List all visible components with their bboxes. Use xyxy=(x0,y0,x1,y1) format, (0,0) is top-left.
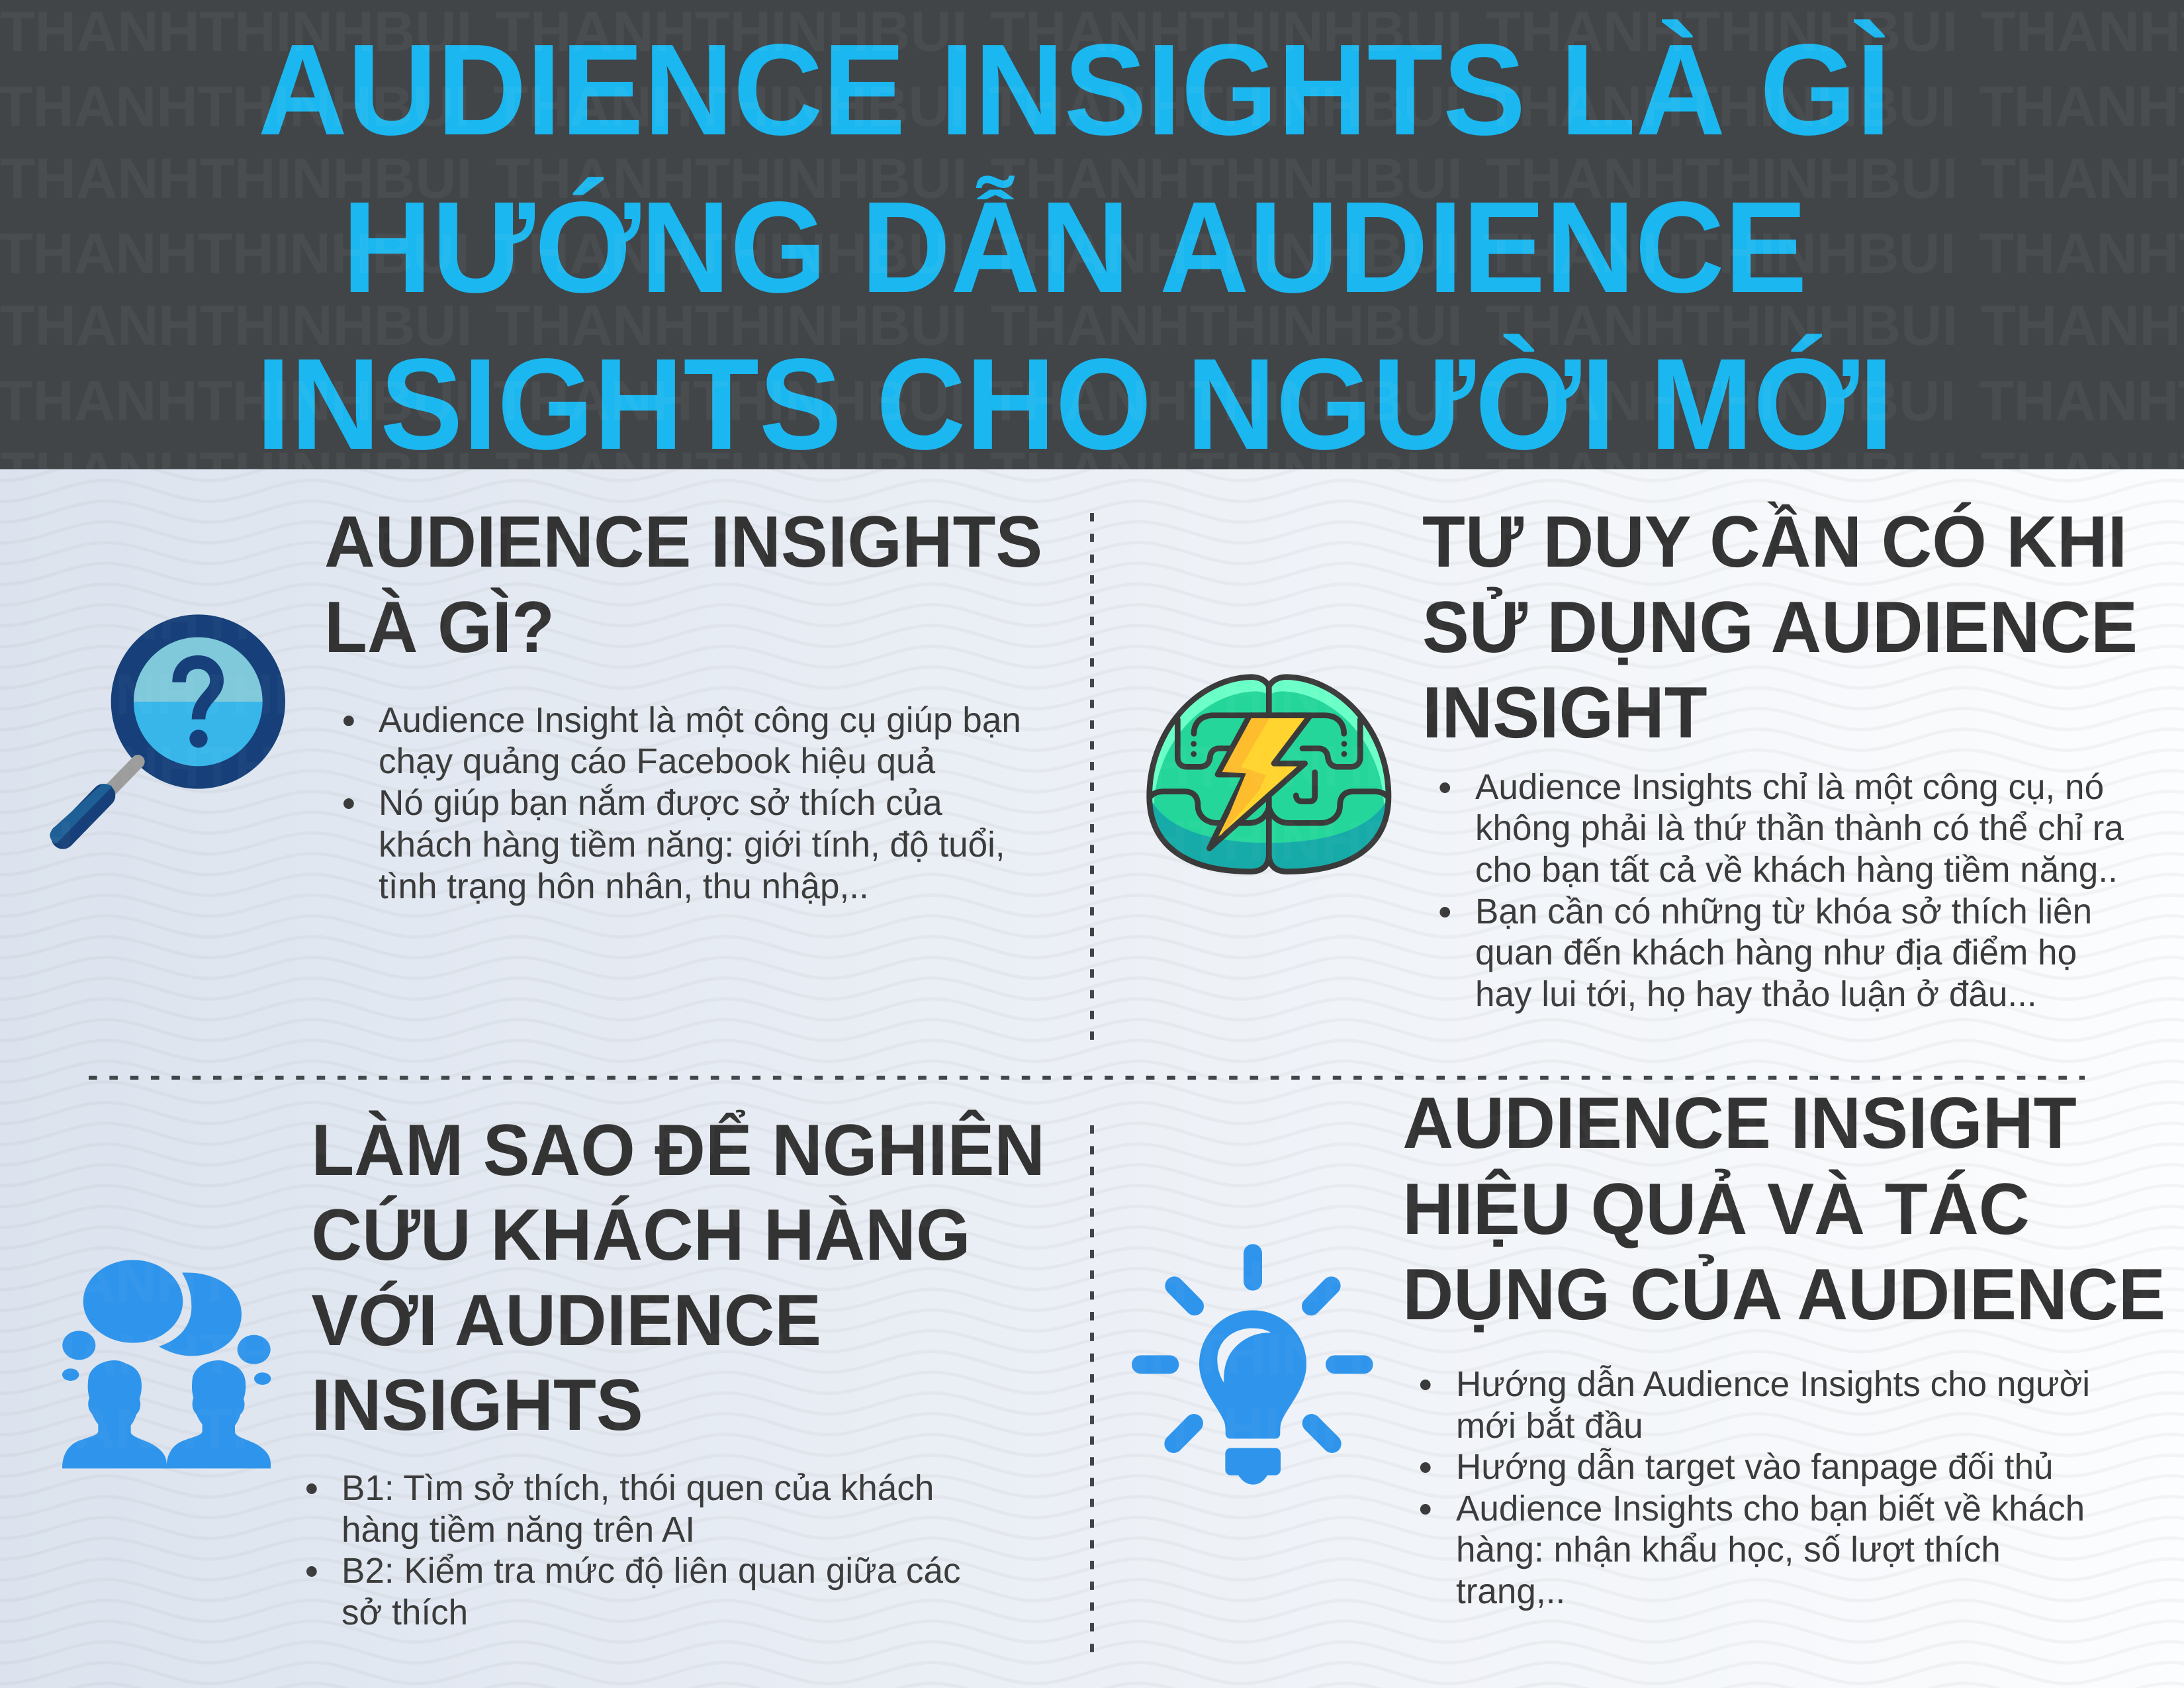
heading xyxy=(324,501,1042,668)
heading: SỬ DỤNG AUDIENCE xyxy=(1422,586,2138,668)
title xyxy=(256,17,1893,477)
panel: mindset xyxy=(1145,501,2138,1014)
panel: how to research customers xyxy=(62,1109,1045,1632)
heading: LÀM SAO ĐỂ NGHIÊN xyxy=(311,1109,1045,1191)
heading: HIỆU QUẢ VÀ TÁC xyxy=(1402,1168,2030,1250)
text block: Hướng dẫn target vào fanpage đối thủ xyxy=(1456,1447,2054,1487)
icon: light bulb xyxy=(1141,1253,1364,1485)
heading: AUDIENCE INSIGHT xyxy=(1402,1082,2077,1164)
text block: Hướng dẫn Audience Insights cho người xyxy=(1456,1364,2090,1404)
text block: tình trạng hôn nhân, thu nhập,.. xyxy=(379,867,869,906)
text block: cho bạn tất cả về khách hàng tiềm năng.. xyxy=(1475,850,2118,890)
text block: B1: Tìm sở thích, thói quen của khách xyxy=(341,1468,934,1508)
text block: hàng tiềm năng trên AI xyxy=(341,1510,695,1550)
text block: Bạn cần có những từ khóa sở thích liên xyxy=(1475,892,2092,931)
text block: Audience Insights chỉ là một công cụ, nó xyxy=(1475,767,2104,807)
panel: effectiveness xyxy=(1141,1082,2165,1611)
text block: Nó giúp bạn nắm được sở thích của xyxy=(379,783,943,823)
title: HƯỚNG DẪN AUDIENCE xyxy=(342,175,1807,320)
text block: sở thích xyxy=(341,1593,468,1632)
heading: AUDIENCE INSIGHTS xyxy=(324,501,1042,583)
icon: brain with lightning xyxy=(1145,671,1393,886)
heading: CỨU KHÁCH HÀNG xyxy=(311,1194,971,1276)
header band xyxy=(0,0,2184,469)
text block: quan đến khách hàng như địa điểm họ xyxy=(1475,933,2077,972)
title: INSIGHTS CHO NGƯỜI MỚI xyxy=(256,332,1893,477)
text block: Audience Insights cho bạn biết về khách xyxy=(1456,1489,2085,1528)
heading xyxy=(311,1109,1045,1446)
text block: khách hàng tiềm năng: giới tính, độ tuổi, xyxy=(379,825,1005,865)
text block: hay lui tới, họ hay thảo luận ở đâu... xyxy=(1475,974,2037,1014)
heading: INSIGHTS xyxy=(311,1364,643,1446)
heading: LÀ GÌ? xyxy=(324,586,555,668)
icon: two people talking xyxy=(62,1260,271,1468)
heading: TƯ DUY CẦN CÓ KHI xyxy=(1422,501,2127,583)
text block: mới bắt đầu xyxy=(1456,1406,1643,1446)
title: AUDIENCE INSIGHTS LÀ GÌ xyxy=(258,17,1891,162)
text block: trang,.. xyxy=(1456,1571,1565,1611)
text block: B2: Kiểm tra mức độ liên quan giữa các xyxy=(341,1551,961,1591)
text block: không phải là thứ thần thành có thể chỉ ra xyxy=(1475,808,2124,848)
heading: VỚI AUDIENCE xyxy=(311,1280,821,1361)
heading: DỤNG CỦA AUDIENCE xyxy=(1402,1254,2165,1335)
text block xyxy=(1439,767,2124,1014)
text block: chạy quảng cáo Facebook hiệu quả xyxy=(379,741,936,781)
text block xyxy=(1420,1364,2090,1611)
heading: INSIGHT xyxy=(1422,672,1707,753)
heading xyxy=(1422,501,2138,753)
text block: Audience Insight là một công cụ giúp bạn xyxy=(379,700,1021,740)
heading xyxy=(1402,1082,2165,1335)
panel: what is audience insights xyxy=(50,501,1042,906)
text block xyxy=(343,700,1021,906)
icon: magnifying glass with question mark xyxy=(50,614,285,843)
text block xyxy=(306,1468,961,1632)
text block: hàng: nhận khẩu học, số lượt thích xyxy=(1456,1530,2001,1570)
